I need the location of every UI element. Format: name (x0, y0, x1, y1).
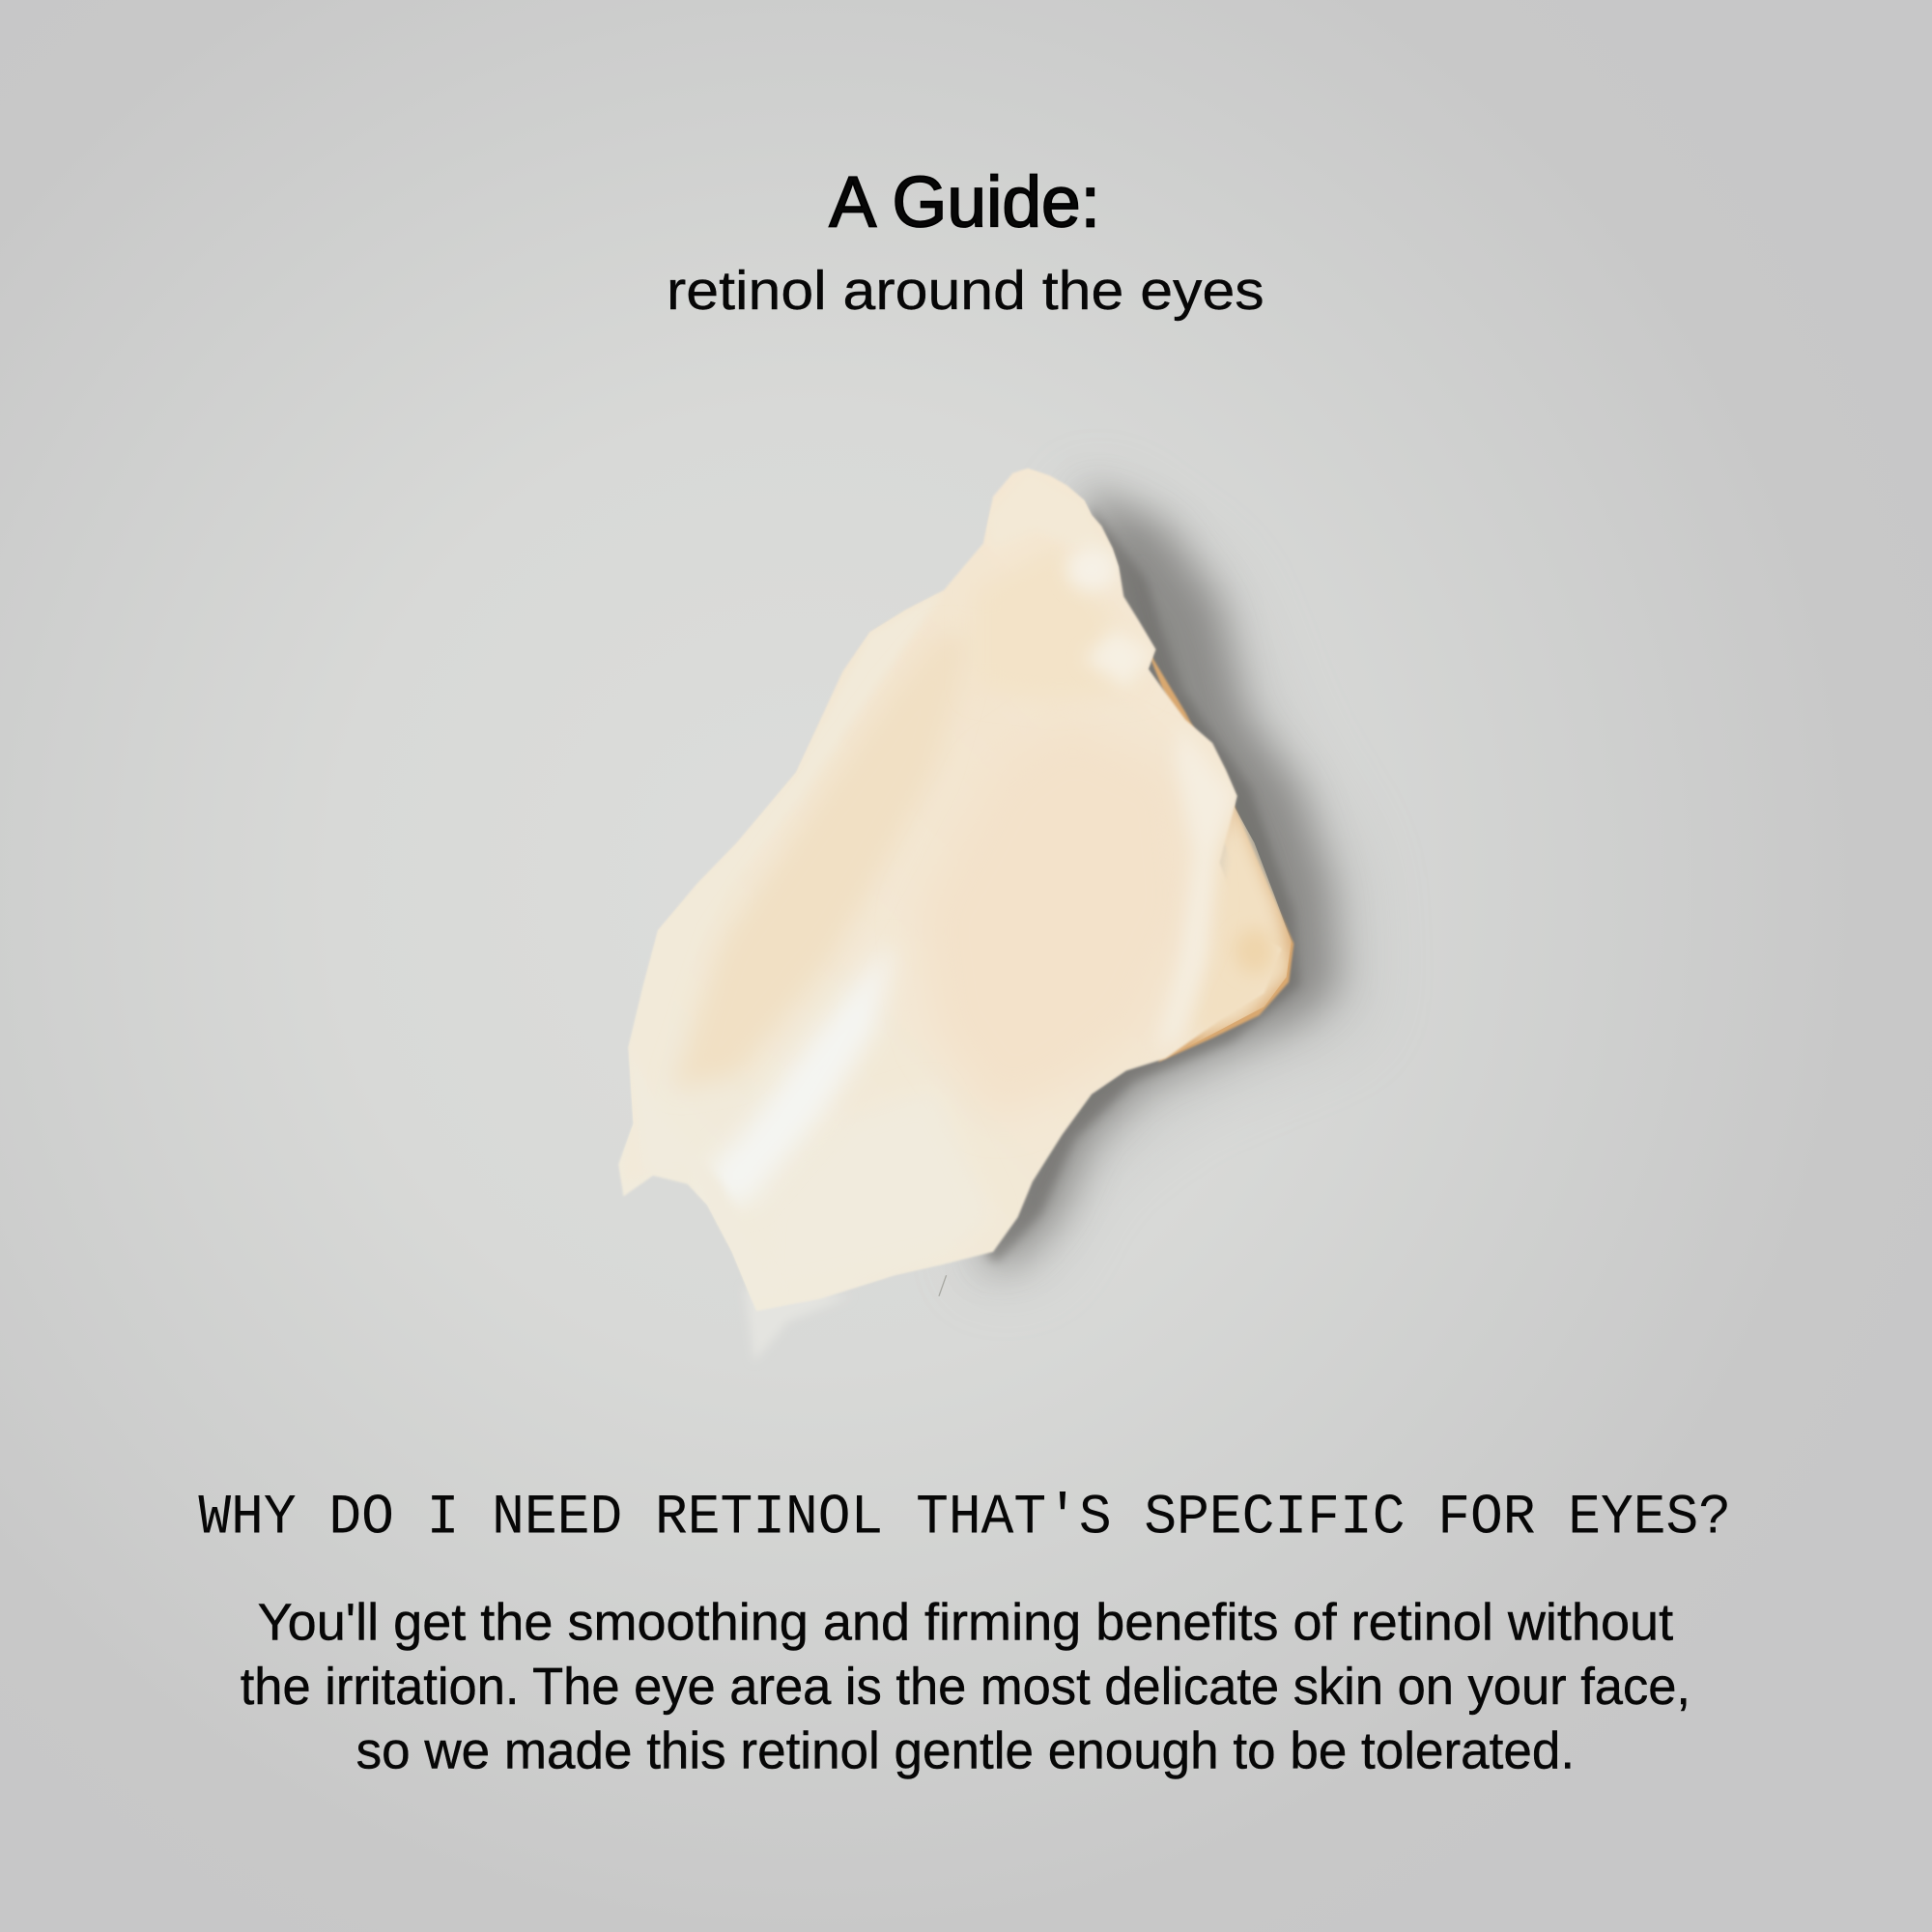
swatch soft halo (974, 480, 1361, 1275)
swatch body (618, 469, 1282, 1311)
top lip (1088, 508, 1096, 521)
body text (241, 1595, 1690, 1779)
warm plateau (942, 920, 1074, 1094)
edge highlight (1084, 629, 1152, 690)
shadow groove (672, 632, 974, 1088)
swatch smear (744, 1288, 850, 1361)
title: A Guide: (829, 162, 1100, 242)
cream swatch photo (618, 469, 1361, 1361)
body text: You'll get the smoothing and firming benefits of retinol without (258, 1595, 1673, 1652)
body text: so we made this retinol gentle enough to be tolerated. (356, 1722, 1575, 1779)
top highlight (1067, 547, 1117, 591)
swatch shading (623, 470, 1292, 1306)
orange crease (1235, 929, 1274, 974)
white streak (707, 941, 895, 1205)
left rim (630, 612, 920, 1135)
swatch orange edge (1146, 647, 1293, 1062)
bottom-left rim (709, 1178, 730, 1247)
specks (939, 1275, 947, 1296)
right rim (1163, 742, 1238, 1039)
pale bottom (756, 1088, 993, 1298)
right lump (1189, 801, 1292, 1041)
upper body (989, 562, 1101, 687)
swatch contact shadow (985, 505, 1300, 1262)
subtitle: retinol around the eyes (667, 260, 1264, 321)
question heading: WHY DO I NEED RETINOL THAT'S SPECIFIC FOR EYES? (198, 1486, 1731, 1550)
swatch cast shadow (980, 487, 1337, 1266)
infographic page (23, 100, 1727, 1779)
body text: the irritation. The eye area is the most delicate skin on your face, (241, 1659, 1690, 1716)
